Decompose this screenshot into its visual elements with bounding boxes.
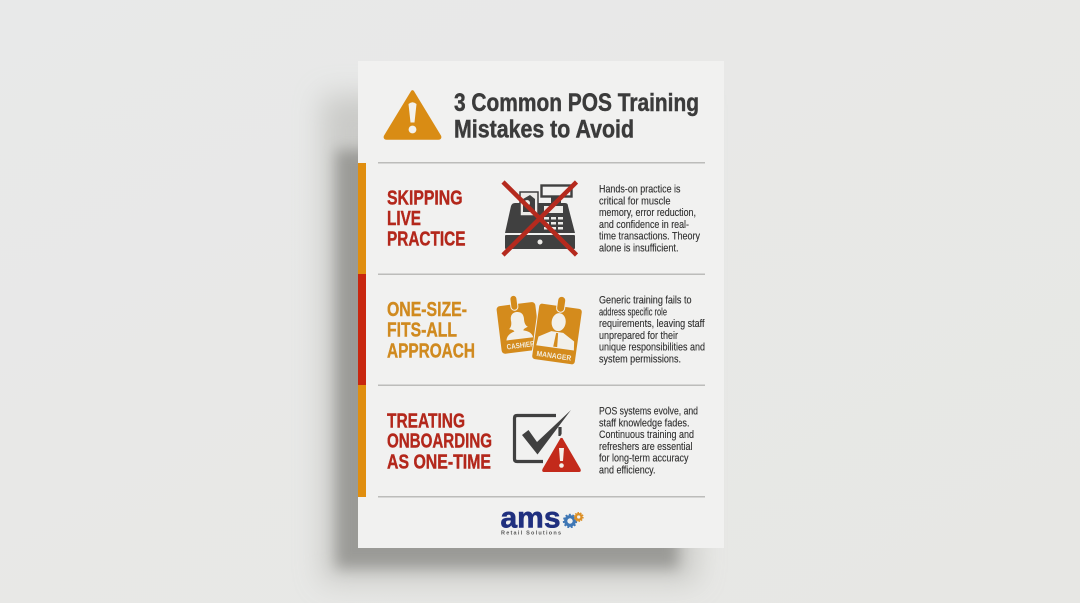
heading: skipping live practice: [387, 188, 466, 251]
panel: poster sheet: [358, 61, 724, 548]
heading: one-size-fits-all approach: FITS-ALL: [387, 320, 457, 342]
text: skipping live practice description: memory, error reduction,: [599, 207, 696, 219]
icon: role id badges: [495, 293, 584, 365]
text: skipping live practice description: and confidence in real-: [599, 219, 689, 231]
text: treating onboarding description: Continuous training and: [599, 429, 694, 441]
heading: skipping live practice: SKIPPING: [387, 188, 462, 210]
title: [454, 89, 699, 144]
text: one-size-fits-all description: address specific role: [599, 306, 667, 318]
logo: ams retail solutions: Retail Solutions: [501, 530, 561, 536]
text: one-size-fits-all description: unique responsibilities and: [599, 342, 705, 354]
text: one-size-fits-all description: Generic training fails to: [599, 294, 692, 306]
title: 3 Common POS Training: [454, 89, 699, 117]
icon: manager badge: MANAGER: [536, 349, 572, 363]
text: treating onboarding description: staff knowledge fades.: [599, 417, 690, 429]
heading: one-size-fits-all approach: ONE-SIZE-: [387, 299, 467, 321]
text: one-size-fits-all description: [599, 294, 705, 366]
icon: warning triangle: [385, 92, 440, 138]
text: treating onboarding description: and efficiency.: [599, 464, 656, 476]
text: one-size-fits-all description: unprepared for their: [599, 330, 678, 342]
logo: ams retail solutions: ams: [500, 502, 560, 534]
heading: one-size-fits-all approach: [387, 299, 475, 362]
panel: skipping live practice: [387, 182, 701, 255]
text: one-size-fits-all description: system permissions.: [599, 354, 681, 366]
side bar: section accents: [358, 163, 366, 497]
heading: treating onboarding as one-time: AS ONE-TIME: [387, 451, 491, 473]
heading: treating onboarding as one-time: [387, 410, 492, 473]
heading: treating onboarding as one-time: ONBOARDING: [387, 431, 492, 453]
icon: checkbox with warning: [514, 410, 584, 475]
panel: one-size-fits-all approach: [387, 293, 705, 366]
text: skipping live practice description: alone is insufficient.: [599, 242, 678, 254]
logo: ams retail solutions: [500, 502, 583, 536]
icon: cashier badge: CASHIER: [506, 339, 536, 351]
text: skipping live practice description: critical for muscle: [599, 195, 671, 207]
text: treating onboarding description: [599, 406, 698, 476]
icon: crossed-out cash register: [503, 182, 576, 255]
panel: treating onboarding as one-time: [387, 406, 698, 476]
text: treating onboarding description: for long-term accuracy: [599, 453, 689, 465]
paper shadow: [322, 95, 697, 582]
icon: gears: [564, 513, 583, 527]
heading: one-size-fits-all approach: APPROACH: [387, 340, 475, 362]
heading: skipping live practice: PRACTICE: [387, 229, 466, 251]
text: treating onboarding description: POS systems evolve, and: [599, 406, 698, 418]
text: skipping live practice description: Hands-on practice is: [599, 184, 680, 196]
heading: treating onboarding as one-time: TREATING: [387, 410, 465, 432]
text: skipping live practice description: time transactions. Theory: [599, 231, 701, 243]
title: Mistakes to Avoid: [454, 116, 634, 144]
text: treating onboarding description: refreshers are essential: [599, 441, 692, 453]
text: one-size-fits-all description: requirements, leaving staff: [599, 318, 705, 330]
text: skipping live practice description: [599, 184, 701, 254]
heading: skipping live practice: LIVE: [387, 208, 421, 230]
